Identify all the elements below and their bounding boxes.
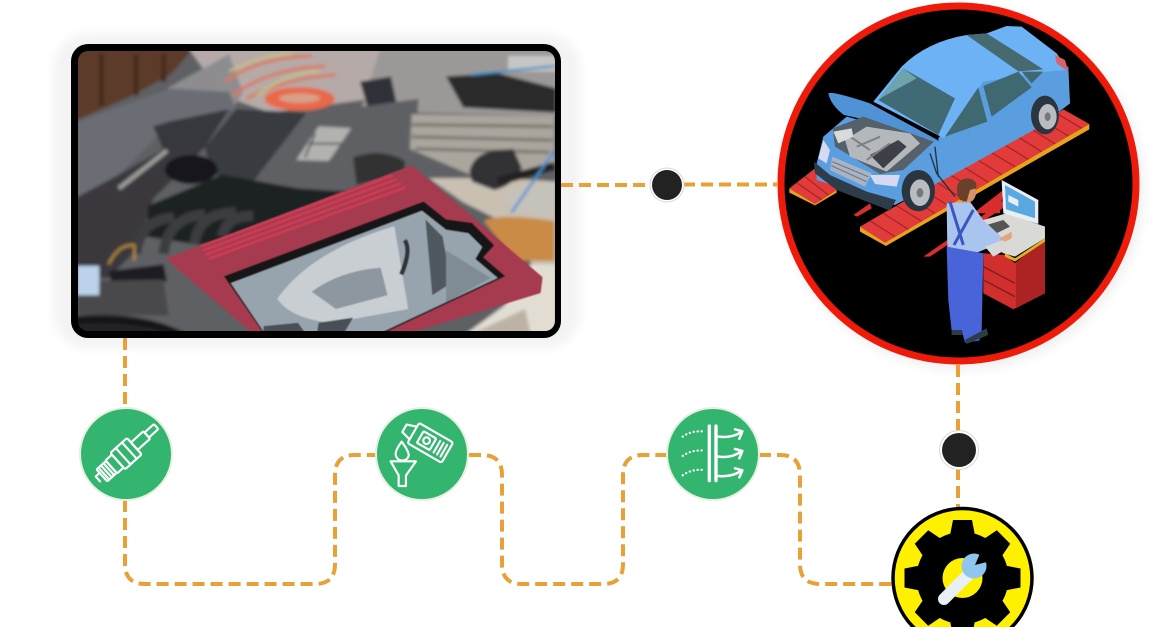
- dot: connector node between car and gear: [940, 430, 978, 470]
- connector: airflow icon to gear: [759, 455, 893, 584]
- connector: photo to dot to car circle: [561, 182, 778, 187]
- connector: spark plug to oil icon: [125, 455, 376, 584]
- connector: photo to spark plug: [123, 338, 127, 408]
- panel: engine photo with diagnostic tablet: [54, 34, 580, 348]
- connector: car circle to dot to gear: [956, 365, 960, 508]
- lift platform: [789, 109, 1089, 257]
- diagnostic cart: [983, 180, 1045, 309]
- dot: connector node between photo and car: [650, 168, 684, 202]
- icon: airflow through filter: [667, 408, 759, 500]
- mechanic: [947, 178, 1012, 344]
- icon: gear with wrench: [893, 508, 1032, 627]
- panel: car on lift illustration: [780, 6, 1144, 370]
- car: [814, 26, 1070, 211]
- connector: oil icon to airflow icon: [469, 455, 667, 584]
- icon: spark plug: [80, 408, 172, 500]
- icon: oil bottle and funnel: [376, 408, 468, 500]
